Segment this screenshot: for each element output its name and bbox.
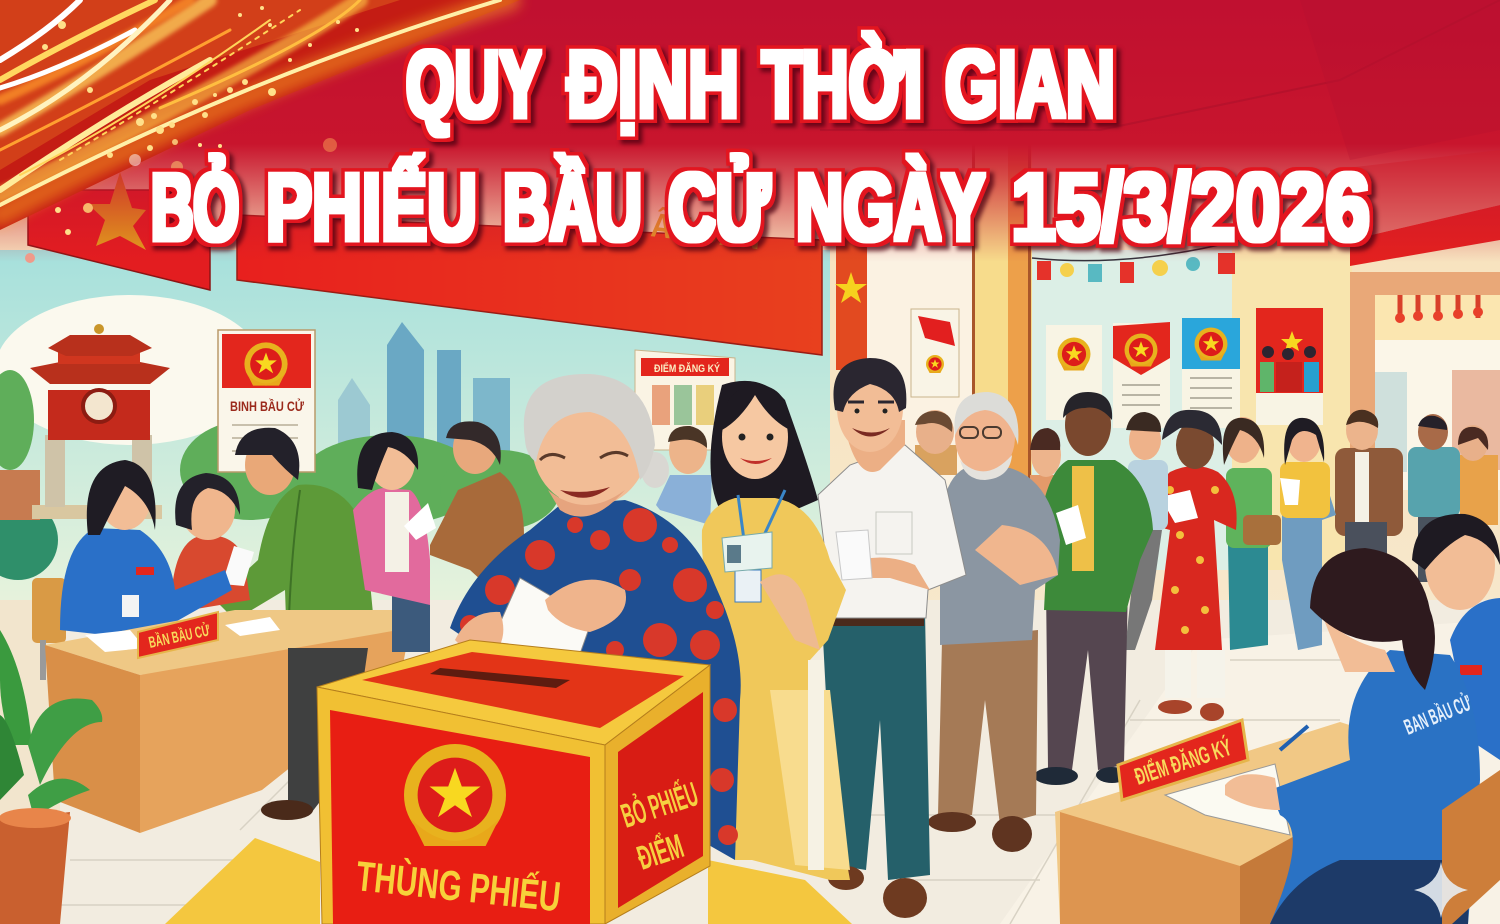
- person: man in brown jacket: [1335, 410, 1403, 582]
- title line 2: [151, 153, 1370, 261]
- wooden chair: [1442, 770, 1500, 924]
- title line 1: QUY: [406, 31, 541, 138]
- young woman in yellow ao dai: [702, 381, 850, 880]
- floor: [0, 600, 1500, 924]
- man with green jacket and dark skin: [1034, 392, 1153, 785]
- poster: Binh Bau Cu: [218, 330, 315, 472]
- potted plant: [0, 630, 102, 924]
- title line 2: 15/3/2026: [1011, 154, 1370, 261]
- left registration desk: [45, 610, 410, 833]
- right wall: [1032, 205, 1500, 570]
- ballot paper: [480, 578, 592, 682]
- poster: red pennant: [1113, 322, 1170, 428]
- person: woman blue behind: [1125, 412, 1168, 650]
- ballot box: [317, 640, 710, 924]
- top-left flag banner: [28, 172, 210, 290]
- box front: [317, 687, 605, 924]
- wall poster with flag: [911, 309, 959, 397]
- wooden column: [972, 130, 1032, 560]
- person: man with glasses: [915, 410, 957, 475]
- large red wall banner: [237, 206, 822, 355]
- title line 1: ĐỊNH: [567, 31, 739, 138]
- title line 2: BỎ: [151, 153, 239, 261]
- elderly woman voting: [450, 374, 741, 860]
- poster: Diem Dang Ky: ĐIỂM ĐĂNG KÝ: [654, 362, 721, 375]
- wall posters with emblems: [1046, 308, 1323, 428]
- old man in gray shirt: [928, 392, 1060, 852]
- title line 2: NGÀY: [796, 154, 985, 261]
- side wall with hanging star strip: [835, 220, 972, 560]
- ballot table: [165, 838, 852, 924]
- left window with city view: [0, 250, 830, 610]
- man in brown jacket: [430, 421, 524, 605]
- poster: Binh Bau Cu: BINH BẦU CỬ: [230, 397, 304, 414]
- woman in pink jacket: [353, 432, 436, 652]
- poster: blue: [1182, 318, 1240, 428]
- red top band: [0, 0, 1500, 262]
- box top: [317, 640, 710, 745]
- title line 1: THỜI: [762, 31, 922, 138]
- background queue: [915, 410, 1498, 721]
- election staff in blue at left desk: [60, 460, 232, 640]
- sparkle icon: [1414, 862, 1468, 918]
- title line 2: PHIẾU: [266, 153, 477, 261]
- person: woman behind old man: [1030, 428, 1061, 500]
- man green shirt seen from behind: [215, 428, 376, 653]
- large red wall banner: ÂN DÂN: [649, 206, 763, 257]
- person: woman in red ao dai: [1152, 410, 1237, 721]
- right registration desk: [1055, 720, 1460, 924]
- title line 1: [406, 31, 1115, 138]
- man blue shirt background: [656, 426, 712, 525]
- box side: BỎ PHIẾU: [617, 775, 703, 836]
- right staff member at back: [1412, 514, 1500, 760]
- trees: [0, 370, 560, 580]
- ceiling detail: [820, 0, 1500, 240]
- person: woman yellow far right: [1458, 425, 1498, 525]
- person: man in teal jacket: [1408, 414, 1460, 582]
- temple illustration: [30, 324, 170, 519]
- poster: Diem Dang Ky: [635, 350, 735, 450]
- box side: ĐIỂM: [633, 827, 688, 878]
- man in white shirt: [818, 358, 966, 918]
- poster: white: [1046, 325, 1102, 420]
- man green legs in front of desk: [261, 648, 368, 820]
- title line 2: BẦU: [503, 153, 642, 261]
- bunting string with flags: [1032, 205, 1350, 283]
- skyline buildings: [338, 322, 510, 470]
- pot: [0, 812, 70, 924]
- cloud: [0, 295, 265, 445]
- title: [151, 31, 1370, 261]
- golden sparks in corner: [0, 0, 520, 263]
- title line 2: CỬ: [668, 153, 770, 261]
- poster: crowd: [1256, 308, 1323, 425]
- desk sign: [1118, 720, 1248, 800]
- desk sign: ĐIỂM ĐĂNG KÝ: [1131, 733, 1235, 791]
- woman in red behind desk: [173, 473, 254, 612]
- flag star: [88, 172, 146, 250]
- box side: [605, 665, 710, 924]
- person: woman with yellow top: [1280, 418, 1336, 650]
- person: woman with green top and teal skirt: [1223, 417, 1281, 650]
- desk sign: [138, 612, 218, 658]
- female staff writing seen from behind: [1225, 548, 1480, 924]
- desk sign: BẦN BẦU CỬ: [147, 620, 212, 652]
- right window: [1350, 272, 1500, 490]
- left chair: [32, 578, 66, 680]
- paper sheet on desk: [1165, 764, 1290, 835]
- title line 1: GIAN: [945, 31, 1115, 138]
